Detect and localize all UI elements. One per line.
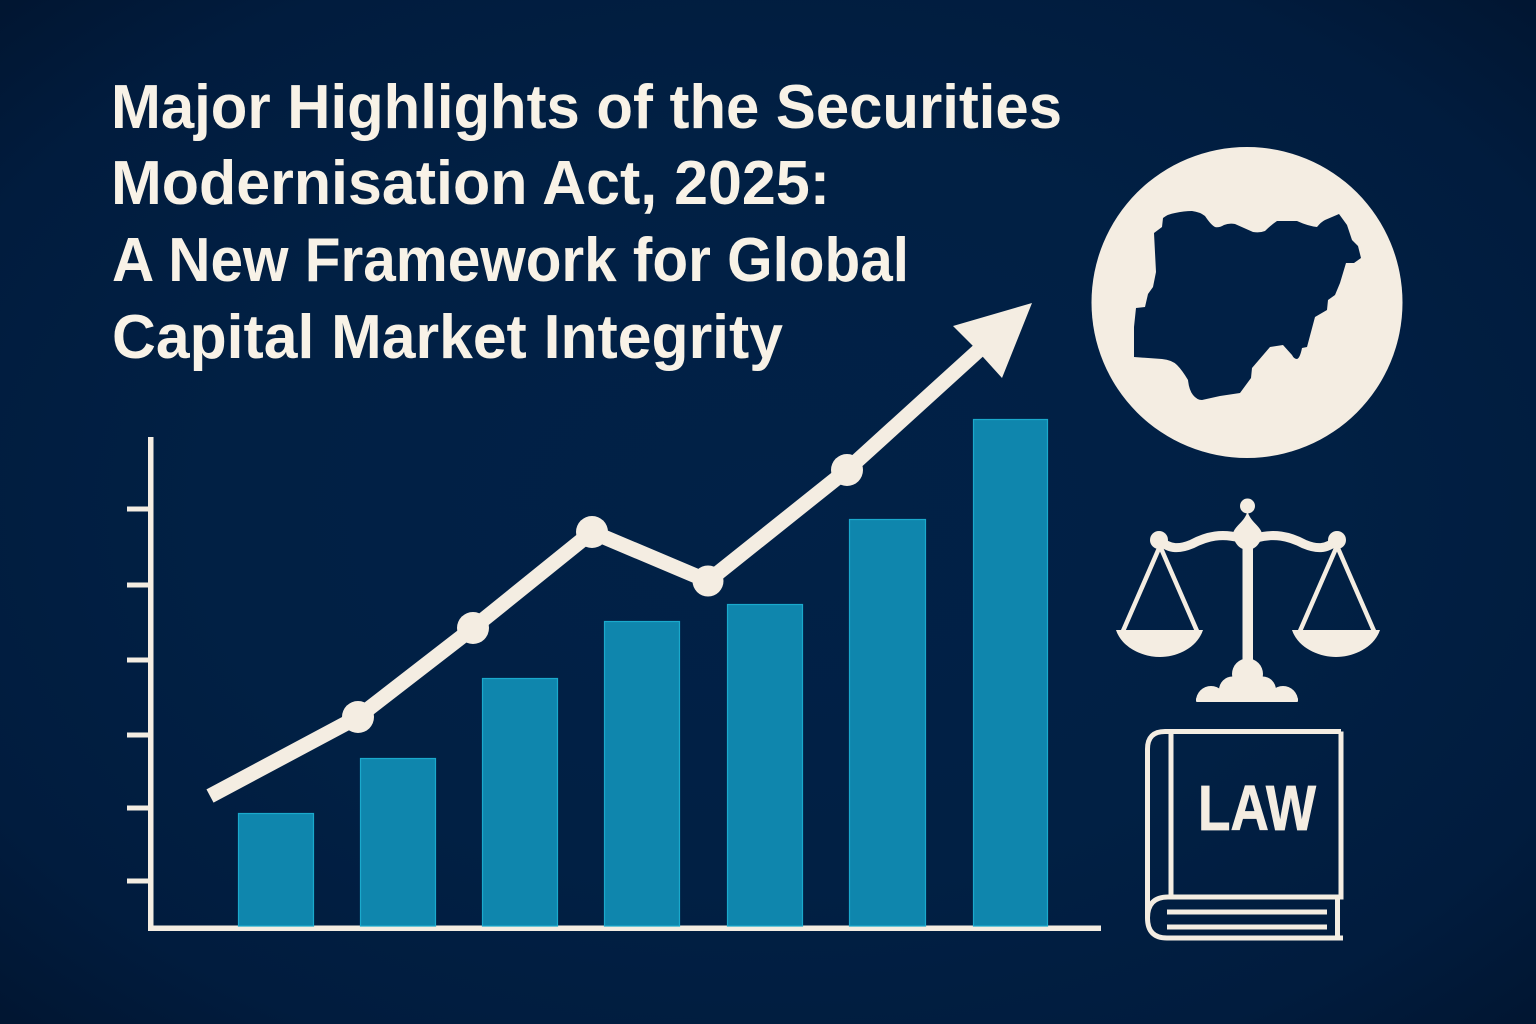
- title: [111, 73, 1062, 372]
- title: Capital Market Integrity: [112, 303, 784, 372]
- title: Major Highlights of the Securities: [111, 73, 1062, 142]
- trend line arrow: [210, 303, 1032, 796]
- icon: law book: [1148, 731, 1343, 938]
- chart axes: [127, 437, 1101, 931]
- title: Modernisation Act, 2025:: [111, 149, 830, 218]
- growth chart: [127, 303, 1101, 931]
- book label: LAW: [1198, 772, 1316, 844]
- bars: [238, 420, 1048, 926]
- icon: Nigeria map in circle: [1092, 147, 1402, 458]
- icon: scales of justice: [1116, 498, 1380, 702]
- title: A New Framework for Global: [112, 226, 909, 295]
